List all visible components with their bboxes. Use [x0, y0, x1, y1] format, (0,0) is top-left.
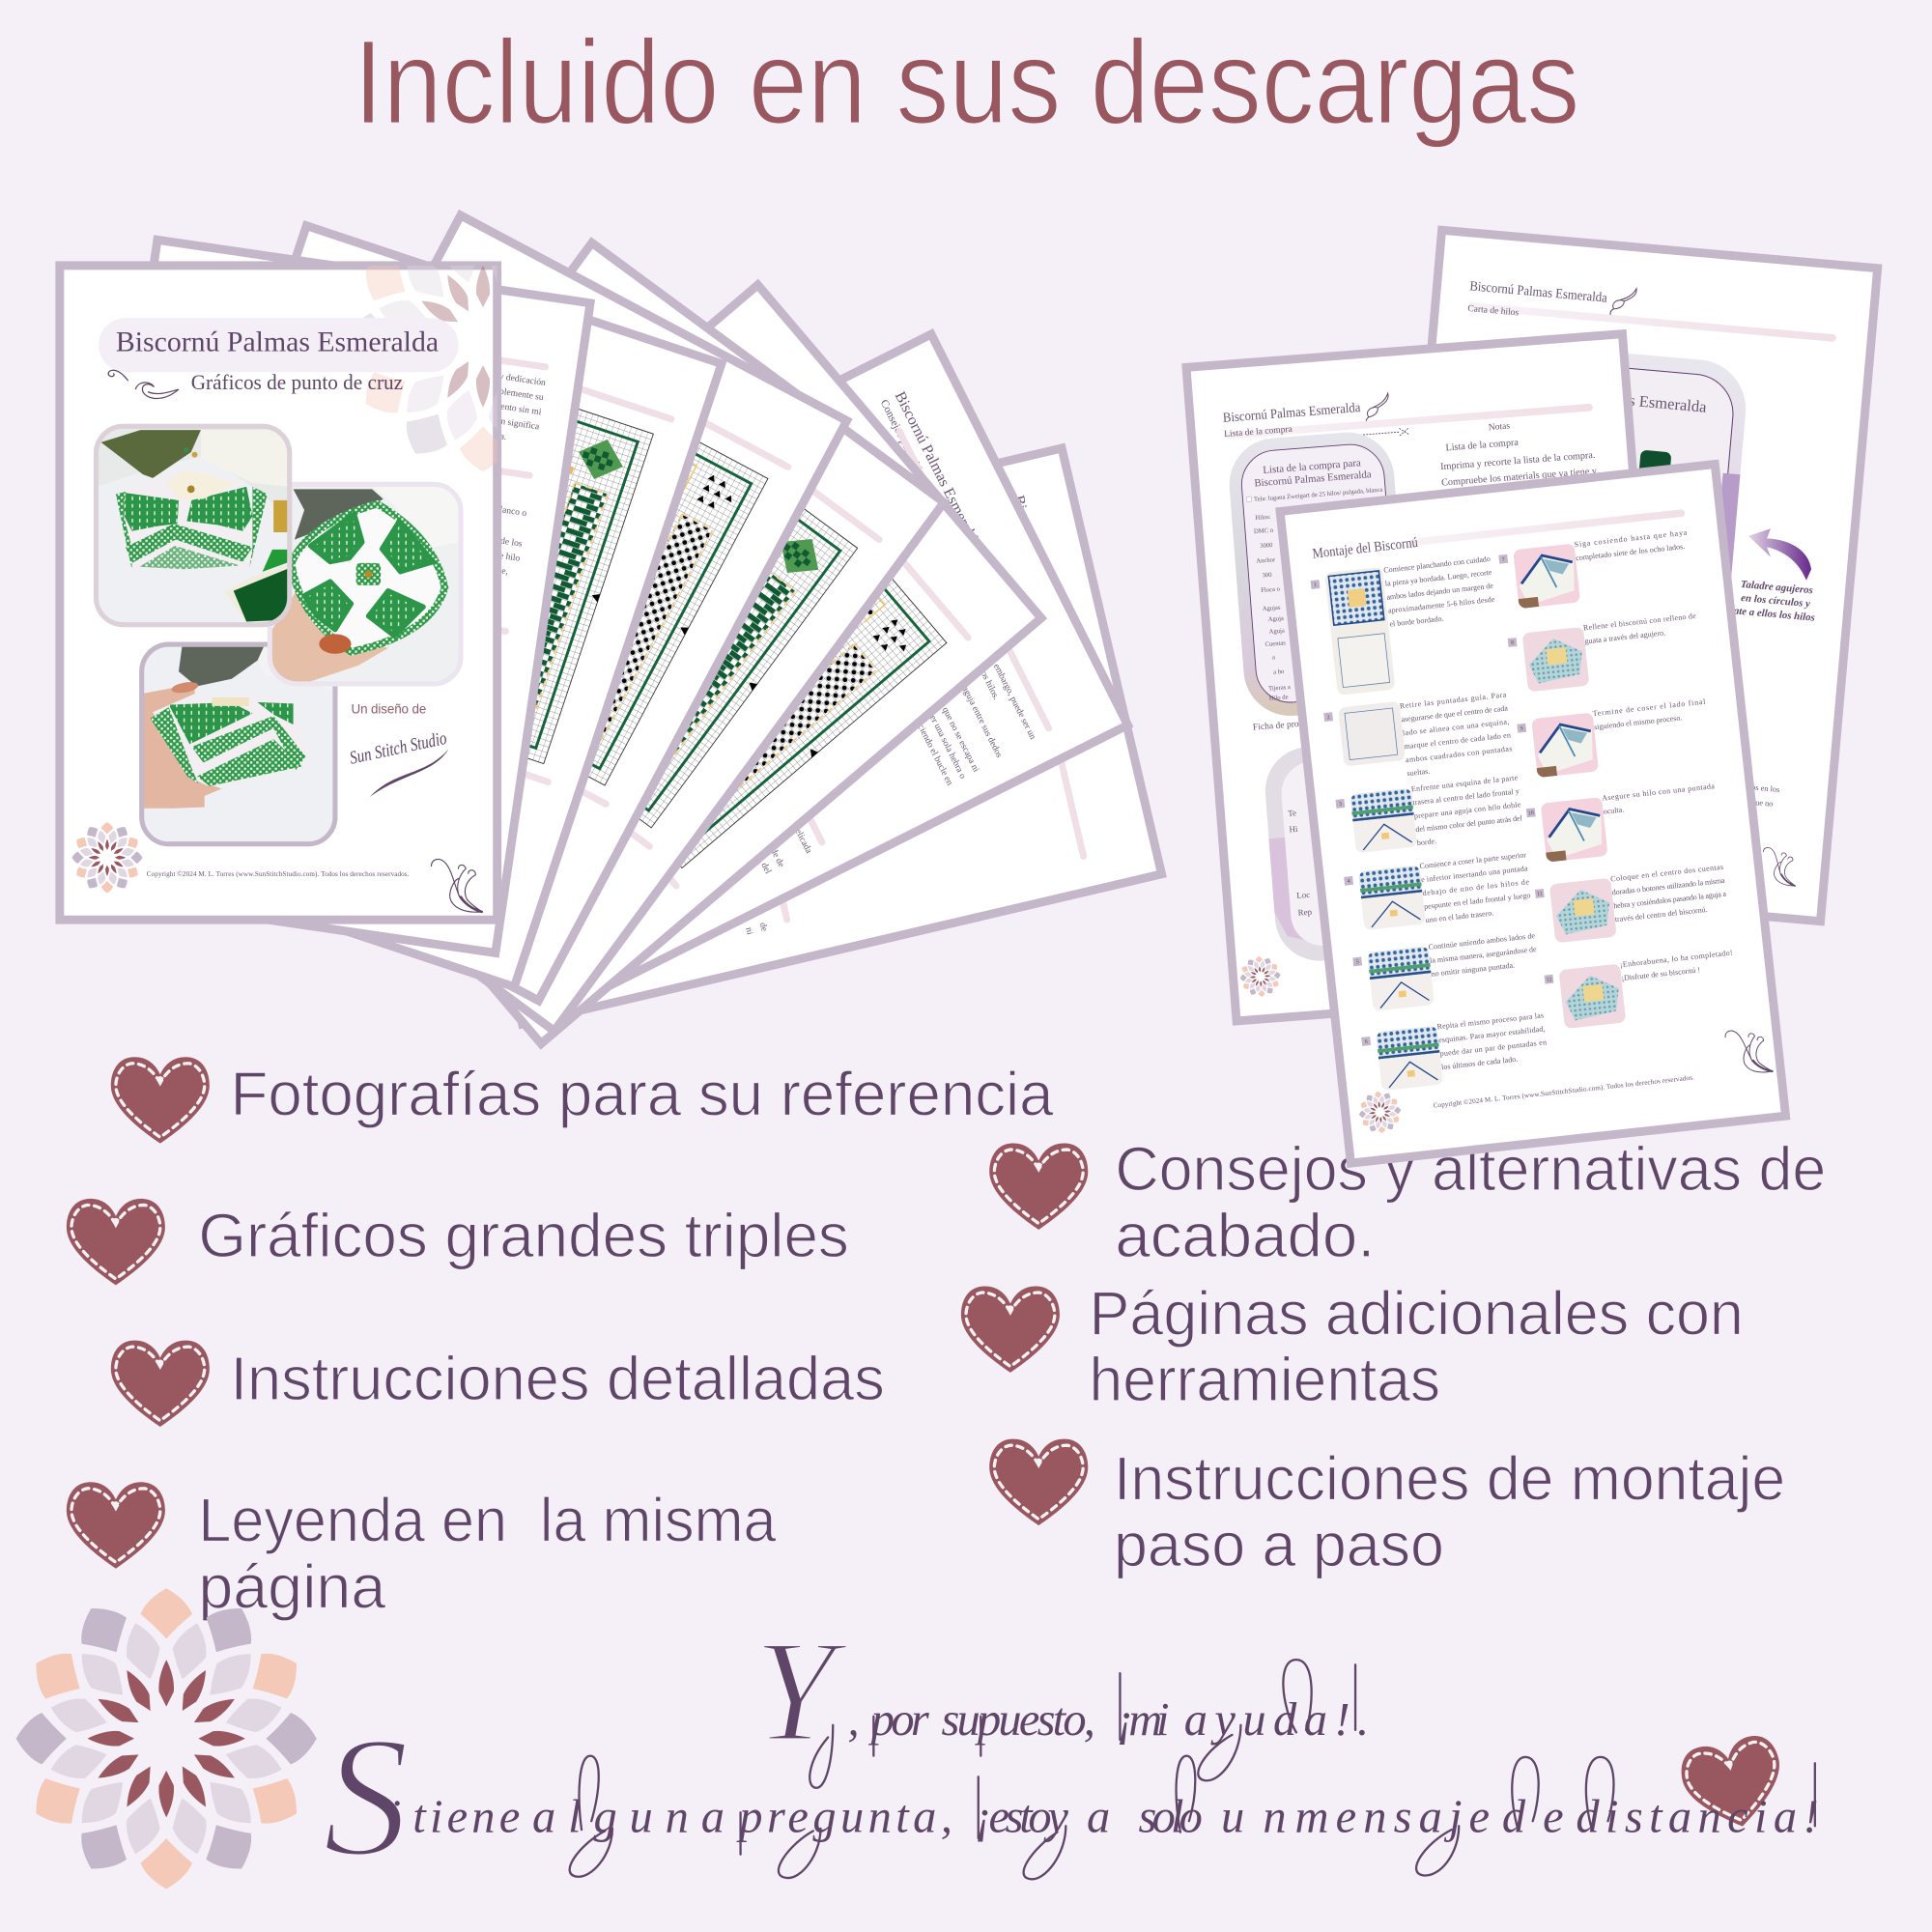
- heading: Biscornú Palmas Esmeralda: [1222, 400, 1362, 426]
- tips text: s del: [756, 856, 774, 876]
- step 8: Rellene el biscornú con relleno de: [1583, 611, 1697, 632]
- bullet: montaje: paso a paso: [1114, 1510, 1444, 1579]
- photo: biscornu on palm: [142, 644, 335, 844]
- ornament flourish: [108, 370, 179, 398]
- page: lista de la compra: [1186, 334, 1673, 1021]
- tips text: ciendo el bucle en: [916, 723, 955, 787]
- project sheet panel: Hi: [1289, 824, 1298, 834]
- step 6: esquinas. Para mayor estabilidad,: [1438, 1024, 1546, 1044]
- bullet: instrucciones: Instrucciones detalladas: [231, 1344, 885, 1413]
- shopping list panel: Tela: lugana Zweigart de 25 hilos/ pulgada, blanca: [1254, 487, 1383, 503]
- page: carta de hilos: [1384, 230, 1878, 922]
- page 6: chart black: [258, 285, 1041, 1043]
- arrow: [1748, 528, 1811, 581]
- copyright: Copyright ©2024 M. L. Torres (www.SunStitchStudio.com). Todos los derechos reservados.: [147, 870, 410, 878]
- step 8: 8: [1511, 640, 1515, 646]
- step 11: doradas o botones utilizando la misma: [1611, 876, 1725, 896]
- small heart on closing line: [1676, 1731, 1791, 1836]
- page 4: chart black: [153, 215, 847, 1001]
- watermark mandala: [363, 266, 497, 471]
- heading: Montaje del Biscornú: [1312, 535, 1419, 562]
- step 3: borde.: [1416, 837, 1437, 847]
- step 8: [1507, 611, 1703, 694]
- small mandala: [1357, 1089, 1404, 1135]
- cover title pill: Biscornú Palmas Esmeralda: [116, 327, 439, 358]
- step 5: la misma manera, asegurándose de: [1430, 945, 1537, 965]
- bullet: montaje: Instrucciones de montaje: [1114, 1443, 1785, 1513]
- step 11: 11: [1537, 892, 1543, 897]
- bullet list left: [67, 1057, 1054, 1622]
- shopping list panel: DMC n: [1254, 527, 1274, 535]
- page: carta de hilos: la tarjeta.: [1718, 809, 1748, 820]
- tips text: que no se escapa ni: [940, 705, 981, 774]
- arrow caption: en los círculos y: [1741, 592, 1811, 610]
- step 11: [1534, 863, 1730, 945]
- page 8: back of the fan: [422, 448, 1162, 1024]
- large mandala: [16, 1588, 317, 1889]
- step 3: trasera al centro del lado frontal y: [1412, 786, 1520, 807]
- step 2: sueltas.: [1406, 767, 1431, 778]
- step 4: uno en el lado trasero.: [1425, 908, 1494, 924]
- step 9: [1517, 697, 1713, 780]
- step 4: 4: [1347, 879, 1350, 885]
- step 3: del mismo color del punto atrás del: [1415, 813, 1523, 834]
- bullet: montaje: [989, 1439, 1785, 1579]
- project sheet panel: [1262, 737, 1451, 964]
- step 7: completado siete de los ocho lados.: [1576, 542, 1686, 562]
- step 9: Termine de coser el lado final: [1592, 697, 1707, 718]
- step 4: debajo de uno de los hilos de: [1422, 877, 1530, 897]
- step 7: [1498, 528, 1693, 611]
- bullet: páginas: [961, 1278, 1744, 1414]
- page 8: back of the fan: Biscornú Palmas Esmeralda: [1010, 494, 1065, 659]
- step 2: [1323, 690, 1515, 786]
- tips text: Sin embargo, puede ser un: [984, 649, 1038, 741]
- step 10: 10: [1528, 810, 1534, 816]
- bullet: gráficos: [67, 1199, 849, 1285]
- introduction paragraph: un momento sin mi: [469, 397, 542, 417]
- step 3: [1335, 773, 1524, 856]
- page 2: introduction text: [63, 240, 590, 952]
- step 6: los últimos de cada lado.: [1441, 1055, 1519, 1071]
- arrow caption: [1733, 578, 1818, 624]
- page 8: back of the fan: ni: [743, 926, 755, 936]
- step 2: ambos cuadrados con puntadas: [1406, 744, 1513, 764]
- introduction paragraph: blanco o: [495, 504, 527, 519]
- step 12: ¡Disfrute de su biscornú !: [1621, 965, 1700, 982]
- introduction paragraph: ra.: [471, 516, 482, 527]
- corner flourish: [1724, 1027, 1773, 1076]
- closing script line 1: ¡mi: [1117, 1694, 1169, 1746]
- project sheet panel: Rep: [1297, 907, 1313, 918]
- step 12: 12: [1546, 977, 1552, 983]
- step 6: puede dar un par de puntadas en: [1439, 1037, 1547, 1058]
- step 6: 6: [1365, 1039, 1368, 1045]
- step 5: 5: [1356, 959, 1359, 966]
- tips text: ser una sola hebra o: [925, 710, 968, 781]
- notes: Imprima y recorte la lista de la compra.: [1440, 450, 1596, 472]
- closing script line 2: distancia!: [1576, 1792, 1819, 1843]
- closing script line 1: [754, 1610, 1369, 1772]
- copyright: Copyright ©2024 M. L. Torres (www.SunStitchStudio.com). Todos los derechos reservados.: [1433, 1073, 1694, 1110]
- page 5: chart green: [202, 242, 944, 1031]
- pink heading bar: [1408, 509, 1686, 547]
- shopping list panel: [1226, 429, 1412, 720]
- introduction paragraph: sible,: [488, 564, 509, 577]
- page: montaje del biscornú: [1280, 465, 1786, 1163]
- closing script line 1: ,: [848, 1694, 860, 1746]
- step 12: [1544, 949, 1739, 1031]
- shopping list panel: Tijeras a: [1268, 684, 1291, 693]
- page: carta de hilos: Carta de hilos: [1467, 303, 1520, 319]
- closing script line 1: ayuda!.: [1184, 1694, 1369, 1746]
- step 9: siguiendo el mismo proceso.: [1594, 713, 1683, 731]
- shopping list panel: Aguja: [1267, 615, 1284, 623]
- project sheet label: Ficha de proyecto: [1253, 717, 1320, 733]
- tips text: delicada: [791, 823, 814, 856]
- introduction paragraph: e hilo: [498, 551, 521, 564]
- step 1: ambos lados dejando un margen de: [1386, 582, 1494, 602]
- step 3: 3: [1339, 802, 1342, 808]
- notes: Lista de la compra: [1445, 438, 1520, 454]
- step 1: la pieza ya bordada. Luego, recorte: [1384, 568, 1492, 588]
- bullet: instrucciones: [111, 1341, 885, 1427]
- project sheet panel: Loc: [1296, 890, 1311, 900]
- notes: [1437, 414, 1598, 489]
- step 7: 7: [1502, 557, 1505, 563]
- shopping list panel: Hilo de: [1269, 694, 1289, 702]
- shopping list panel: Hilos:: [1255, 514, 1271, 522]
- bullet: consejos: acabado.: [1115, 1201, 1375, 1270]
- shopping list panel: Biscornú Palmas Esmeralda: [1254, 469, 1372, 490]
- small mandala: [1238, 954, 1282, 998]
- closing script line 1: supuesto,: [941, 1694, 1095, 1746]
- introduction paragraph: recuerda.: [472, 427, 507, 442]
- cover subtitle: Gráficos de punto de cruz: [191, 371, 403, 394]
- tips text: aguja entre sus dedos: [959, 685, 1005, 759]
- arrow caption: Taladre agujeros: [1740, 579, 1813, 596]
- closing script line 2: i: [388, 1792, 401, 1843]
- step 2: marque el centro de cada lado en: [1404, 730, 1511, 751]
- closing script line 1: Y: [754, 1610, 849, 1772]
- closing script line 2: pregunta,: [736, 1792, 952, 1843]
- step 11: través del centro del biscornú.: [1614, 905, 1708, 923]
- step 10: [1525, 781, 1721, 864]
- thread card panel: Biscornú Palmas Esmeralda: [1526, 383, 1708, 416]
- bullet: páginas: herramientas: [1090, 1345, 1440, 1414]
- closing script line 2: [323, 1701, 1819, 1892]
- tips text: [720, 649, 1039, 878]
- project sheet panel: Te: [1288, 808, 1296, 818]
- step 4: [1343, 850, 1533, 933]
- page subtitle: Consejos para el bordado: [878, 398, 939, 503]
- photo: biscornu held in hand: [270, 484, 461, 684]
- closing script line 2: alguna: [532, 1792, 724, 1843]
- bullet: gráficos: Gráficos grandes triples: [198, 1201, 849, 1270]
- designer credit: Un diseño de: [352, 702, 426, 717]
- title: Incluido en sus descargas: [354, 16, 1579, 150]
- step 11: Coloque en el centro dos cuentas: [1610, 863, 1723, 883]
- thread card panel: [1468, 342, 1749, 751]
- page: lista de la compra: Lista de la compra: [1224, 424, 1293, 440]
- introduction paragraph: [416, 365, 547, 654]
- page 8: back of the fan: de: [757, 922, 770, 932]
- step 8: guata a través del agujero.: [1584, 628, 1665, 645]
- closing script line 2: tiene: [412, 1792, 520, 1843]
- bullet: leyenda: página: [198, 1552, 386, 1622]
- notes: Notas: [1488, 421, 1511, 433]
- step 1: Comience planchando con cuidado: [1383, 554, 1491, 575]
- step 10: oculta.: [1603, 805, 1625, 816]
- signature: Sun Stitch Studio: [348, 728, 448, 769]
- bullet: consejos: Consejos y alternativas de: [1115, 1134, 1826, 1204]
- closing script line 2: a: [1087, 1792, 1110, 1843]
- closing script line 2: ¡estoy: [975, 1792, 1068, 1843]
- introduction paragraph: de los: [499, 536, 524, 550]
- step 2: Retire las puntadas guía. Para: [1399, 690, 1507, 710]
- scissors: [1335, 428, 1409, 440]
- heading: Biscornú Palmas Esmeralda: [1469, 278, 1608, 306]
- step 6: [1360, 1010, 1549, 1093]
- bullet: consejos: [989, 1134, 1826, 1270]
- step 4: Comience a coser la parte superior: [1419, 850, 1527, 870]
- step 3: prepare una aguja con hilo doble: [1413, 800, 1521, 820]
- step 1: [1310, 554, 1504, 697]
- bullet list right: [961, 1134, 1826, 1579]
- shopping list panel: Aguja: [1268, 628, 1285, 636]
- closing script line 2: S: [323, 1701, 409, 1892]
- bullet: leyenda: [67, 1482, 777, 1622]
- step 11: hebra y cosiéndolos pasando la aguja a: [1613, 890, 1727, 910]
- step 1: aproximadamente 5-6 hilos desde: [1387, 595, 1495, 615]
- step 1: 1: [1314, 582, 1317, 588]
- introduction paragraph: con tiempo y dedicación: [455, 365, 547, 388]
- introduction paragraph: n: [465, 638, 471, 649]
- step 2: lado se alinea con una esquina,: [1403, 717, 1510, 737]
- step 3: Enfrente una esquina de la parte: [1410, 773, 1519, 793]
- page 7: tips: [345, 334, 1127, 1020]
- closing script line 2: solo: [1139, 1792, 1203, 1843]
- closing script line 1: por: [868, 1694, 929, 1746]
- step 1: el borde bordado.: [1389, 614, 1444, 629]
- page: carta de hilos: en cuenta que no: [1719, 795, 1774, 809]
- page title: Biscornú Palmas Esmeralda: [892, 389, 983, 551]
- step 12: ¡Enhorabuena, lo ha completado!: [1619, 949, 1733, 969]
- tips text: estos hilos.: [974, 660, 1002, 701]
- step 7: Siga cosiendo hasta que haya: [1574, 528, 1688, 549]
- tips text: de de: [768, 846, 786, 869]
- shopping list panel: Cuentas: [1264, 639, 1287, 648]
- bullet: páginas: Páginas adicionales con: [1090, 1278, 1744, 1348]
- shopping list panel: 3000: [1260, 542, 1273, 550]
- shopping list panel: a bo: [1273, 668, 1285, 676]
- step 6: Repita el mismo proceso para las: [1436, 1010, 1544, 1031]
- step 2: 2: [1326, 715, 1330, 721]
- shopping list panel: 300: [1262, 572, 1273, 580]
- shopping list panel: Lista de la compra para: [1263, 457, 1361, 476]
- bullet: leyenda: Leyenda en la misma: [198, 1486, 777, 1555]
- cover title pill: [99, 318, 458, 372]
- cover page: [55, 261, 502, 924]
- shopping list panel: Floca o: [1261, 585, 1281, 594]
- step 5: [1352, 931, 1542, 1013]
- photo: biscornu side view: [96, 426, 290, 625]
- closing script line 2: un: [1221, 1792, 1287, 1843]
- bullet: fotografías: Fotografías para su referencia: [231, 1059, 1054, 1128]
- shopping list panel: Anchor: [1256, 556, 1276, 565]
- arrow caption: ate a ellos los hilos: [1733, 605, 1815, 624]
- step 2: asegurarse de que el centro de cada: [1401, 703, 1509, 724]
- step 5: Continúe uniendo ambos lados de: [1428, 931, 1536, 952]
- closing script line 2: mensaje: [1295, 1792, 1490, 1843]
- fan of pattern pages: [60, 201, 1162, 1043]
- step 5: no omitir ninguna puntada.: [1431, 961, 1515, 979]
- shopping list panel: a: [1272, 654, 1275, 661]
- introduction paragraph: inevitablemente su: [474, 383, 545, 403]
- page 3: chart green: [99, 226, 722, 987]
- shopping list panel: Agujas: [1262, 605, 1281, 612]
- corner flourish: [431, 860, 482, 912]
- introduction paragraph: atención significa: [473, 412, 541, 433]
- small mandala logo: [71, 822, 143, 893]
- hole instructions: los agujeros en los: [1720, 781, 1780, 794]
- step 4: e inferior insertando una puntada: [1421, 864, 1528, 884]
- notes: Compruebe los materials que ya tiene y: [1441, 466, 1598, 489]
- step 10: Asegure su hilo con una puntada: [1602, 781, 1716, 803]
- closing script line 2: de: [1502, 1792, 1564, 1843]
- signature: [348, 728, 448, 797]
- extra pages group: [1186, 230, 1878, 1163]
- step 4: pespunte en el lado frontal y luego: [1424, 891, 1531, 911]
- step 9: 9: [1520, 726, 1523, 732]
